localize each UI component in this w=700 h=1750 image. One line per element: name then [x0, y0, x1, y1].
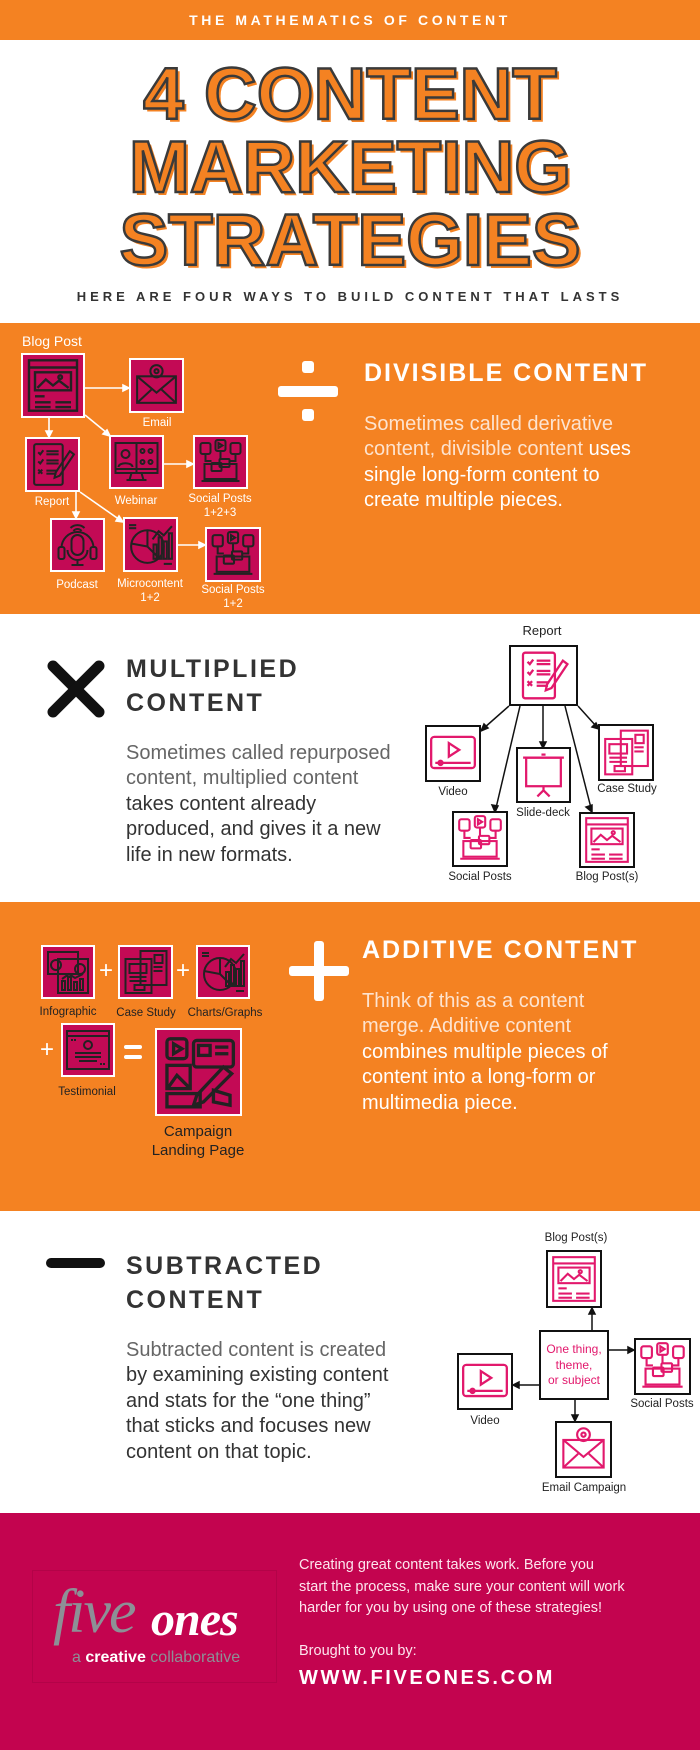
text: multiplied description: Sometimes called repurposed [126, 742, 391, 764]
label: social posts: Social Posts [630, 1398, 694, 1410]
additive diagram [40, 945, 262, 1159]
heading: divisible content: DIVISIBLE CONTENT [364, 359, 648, 387]
icon: report [509, 645, 578, 706]
heading: subtracted content: SUBTRACTED [126, 1252, 323, 1280]
text: divisible description [364, 413, 631, 511]
icon: social posts [193, 435, 248, 489]
logo: five ones: a creative collaborative [72, 1649, 240, 1666]
icon: charts [196, 945, 250, 999]
text: website: WWW.FIVEONES.COM [299, 1667, 555, 1689]
label: microcontent: Microcontent [117, 578, 183, 590]
icon: report [25, 437, 80, 492]
heading: subtracted content [126, 1252, 323, 1314]
icon: testimonial [61, 1023, 115, 1077]
title: STRATEGIES [119, 200, 581, 281]
label: blog posts: Blog Post(s) [576, 871, 638, 883]
plus: + [99, 957, 113, 984]
icon: email [555, 1421, 612, 1478]
icon: blog post [21, 353, 85, 418]
text: divisible description: Sometimes called derivative [364, 413, 613, 435]
footer [0, 1513, 700, 1750]
label: report: Report [35, 496, 69, 508]
panel: subtracted content [46, 1232, 694, 1494]
heading: multiplied content: MULTIPLIED [126, 655, 299, 683]
logo: five ones [32, 1570, 277, 1683]
label: social posts 1+2+3: 1+2+3 [204, 507, 236, 519]
center box: one thing: One thing, [546, 1342, 602, 1356]
label: report: Report [522, 623, 562, 638]
text: additive description: Think of this as a content [362, 990, 584, 1012]
top banner [0, 0, 700, 40]
label: campaign landing page: Campaign [164, 1123, 232, 1140]
heading: multiplied content [126, 655, 299, 717]
heading: subtracted content: CONTENT [126, 1286, 264, 1314]
icon: social posts 2 [205, 527, 261, 582]
plus: + [176, 957, 190, 984]
subtitle: HERE ARE FOUR WAYS TO BUILD CONTENT THAT LASTS [77, 289, 623, 304]
divisible diagram [21, 333, 265, 610]
label: case study: Case Study [116, 1007, 176, 1019]
text: subtracted description: by examining existing content [126, 1364, 388, 1386]
label: webinar: Webinar [115, 495, 157, 507]
text: additive description [362, 990, 608, 1114]
icon: webinar [109, 435, 164, 489]
title: MARKETING [129, 127, 571, 208]
text: closing message: Creating great content takes work. Before you [299, 1557, 594, 1573]
label: social posts: Social Posts [448, 871, 512, 883]
label: social posts 1+2: Social Posts [201, 584, 265, 596]
icon: microcontent [123, 517, 178, 572]
icon: podcast [50, 518, 105, 572]
label: social posts 1+2+3: Social Posts [188, 493, 252, 505]
icon: minus [46, 1258, 105, 1268]
text: multiplied description [126, 742, 391, 866]
text: multiplied description: takes content already [126, 793, 316, 815]
icon: plus [289, 941, 349, 1001]
text: multiplied description: content, multiplied content [126, 767, 358, 789]
text: subtracted description: and stats for the “one thing” [126, 1390, 371, 1412]
text: subtracted description: content on that topic. [126, 1441, 312, 1463]
label: microcontent [117, 578, 183, 604]
label: charts/graphs: Charts/Graphs [188, 1007, 262, 1019]
label: blog posts: Blog Post(s) [545, 1232, 607, 1244]
top banner: THE MATHEMATICS OF CONTENT [189, 12, 511, 28]
icon: landing page [155, 1028, 242, 1116]
icon: video [425, 725, 481, 782]
label: campaign landing page: Landing Page [152, 1142, 244, 1159]
text: divisible description: content, divisible content uses [364, 438, 631, 460]
label: email campaign: Email Campaign [542, 1482, 626, 1494]
label: video: Video [438, 786, 468, 798]
subtracted diagram [457, 1232, 694, 1494]
logo: five ones: ones [151, 1593, 238, 1646]
text: closing message: start the process, make sure your content will work [299, 1578, 625, 1594]
plus: + [40, 1036, 54, 1063]
icon: divide [278, 361, 338, 421]
text: additive description: content into a long-form or [362, 1066, 595, 1088]
title [119, 54, 581, 281]
text: divisible description: single long-form content to [364, 464, 600, 486]
label: email: Email [143, 417, 171, 429]
heading: additive content: ADDITIVE CONTENT [362, 936, 638, 964]
icon: case study [598, 724, 654, 781]
text: additive description: combines multiple pieces of [362, 1041, 608, 1063]
text: multiplied description: produced, and gives it a new [126, 818, 381, 840]
icon: video [457, 1353, 513, 1410]
icon: social posts [634, 1338, 691, 1395]
label: microcontent: 1+2 [140, 592, 160, 604]
multiplied diagram [425, 623, 657, 883]
icon: case study [118, 945, 173, 999]
panel: additive content [0, 902, 700, 1211]
center box: one thing: or subject [548, 1373, 600, 1387]
text: multiplied description: life in new formats. [126, 844, 293, 866]
text: additive description: merge. Additive content [362, 1015, 571, 1037]
heading: multiplied content: CONTENT [126, 689, 264, 717]
icon: email [129, 358, 184, 413]
logo: five ones: five [53, 1578, 134, 1646]
panel: divisible content [0, 323, 700, 614]
label: campaign landing page [152, 1123, 244, 1159]
center box: one thing: theme, [556, 1358, 592, 1372]
label: testimonial: Testimonial [58, 1086, 116, 1098]
label: case study: Case Study [597, 783, 657, 795]
text: subtracted description: that sticks and focuses new [126, 1415, 371, 1437]
label: video: Video [470, 1415, 500, 1427]
center box: one thing [539, 1330, 609, 1400]
text: closing message [299, 1557, 625, 1616]
icon: blog posts [579, 812, 635, 868]
text: divisible description: create multiple pieces. [364, 489, 563, 511]
label: social posts 1+2 [201, 584, 265, 610]
label: social posts 1+2+3 [188, 493, 252, 519]
label: infographic: Infographic [40, 1006, 96, 1018]
label: social posts 1+2: 1+2 [223, 598, 243, 610]
icon: social posts [452, 811, 508, 867]
text: subtracted description: Subtracted content is created [126, 1339, 386, 1361]
label: podcast: Podcast [56, 579, 98, 591]
icon: blog posts [546, 1250, 602, 1308]
icon: infographic [41, 945, 95, 999]
text: closing message: harder for you by using one of these strategies! [299, 1600, 602, 1616]
icon: slide-deck [516, 747, 571, 803]
text: subtracted description [126, 1339, 388, 1463]
text: additive description: multimedia piece. [362, 1092, 518, 1114]
label: blog post: Blog Post [22, 333, 82, 349]
equals [124, 1045, 142, 1059]
icon: multiply [48, 660, 104, 718]
title: 4 CONTENT [143, 54, 557, 135]
label: slide-deck: Slide-deck [516, 807, 570, 819]
text: brought to you by: Brought to you by: [299, 1643, 417, 1659]
panel: multiplied content [48, 623, 657, 883]
